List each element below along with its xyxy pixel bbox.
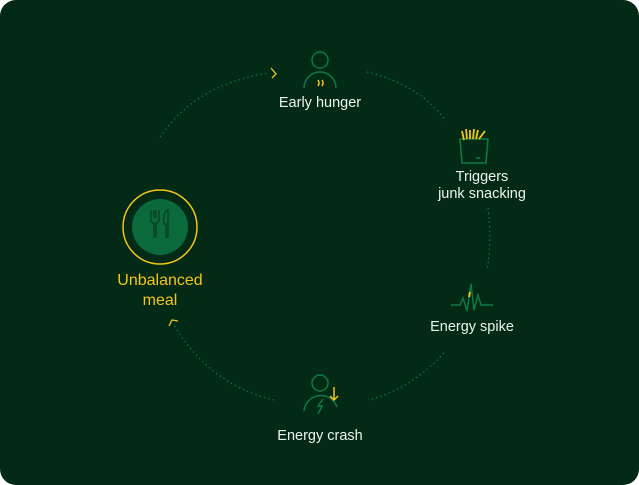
arc: junk to spike — [487, 208, 490, 270]
icon: person early hunger — [304, 52, 336, 88]
icon: energy crash person — [304, 375, 338, 414]
icon: pulse spike — [451, 284, 493, 311]
arc: spike to crash — [368, 353, 444, 400]
label: unbalanced meal: Unbalanced — [117, 272, 203, 289]
label: triggers junk snacking: junk snacking — [438, 186, 526, 202]
label: energy spike: Energy spike — [430, 319, 514, 335]
arc: meal to hunger — [160, 68, 276, 137]
label: unbalanced meal — [117, 272, 203, 309]
label: unbalanced meal: meal — [143, 292, 177, 309]
label: triggers junk snacking — [438, 169, 526, 202]
icon: fries — [460, 129, 488, 163]
arc: crash to meal — [169, 320, 274, 400]
label: triggers junk snacking: Triggers — [456, 169, 508, 185]
icon: meal plate — [123, 190, 197, 264]
label: energy crash: Energy crash — [277, 428, 363, 444]
arc: hunger to junk — [367, 72, 446, 121]
label: early hunger: Early hunger — [279, 95, 361, 111]
